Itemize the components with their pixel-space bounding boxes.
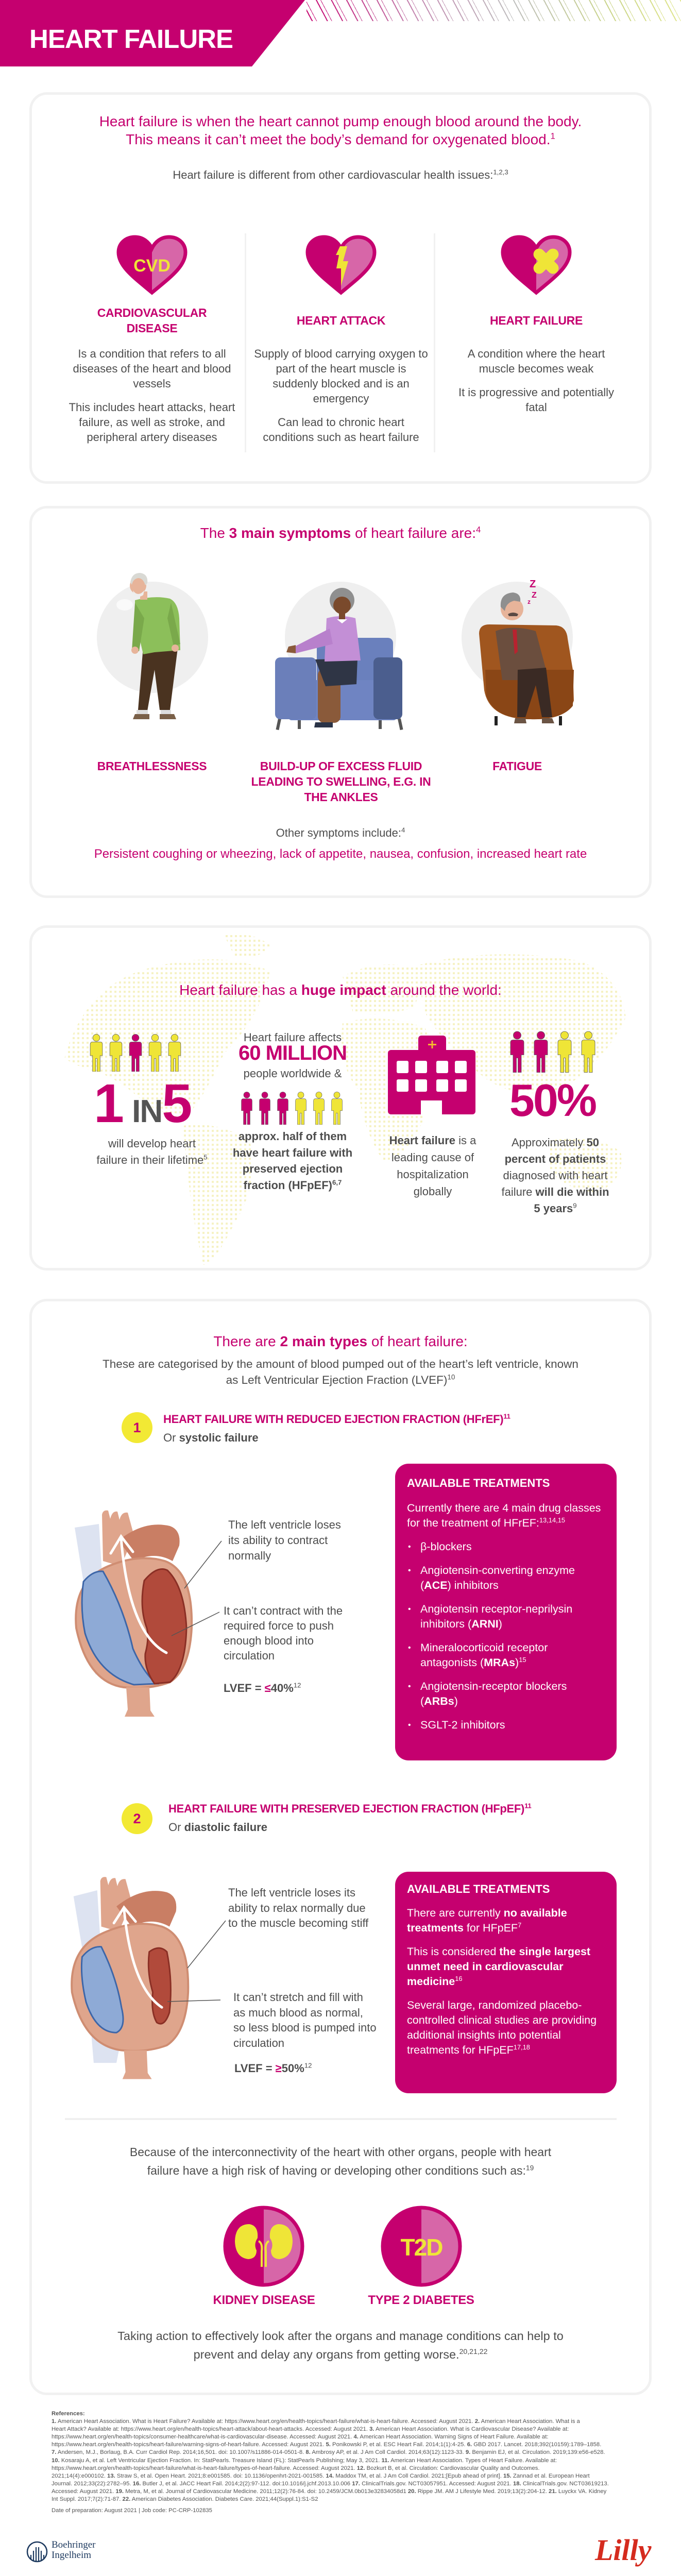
treatments box 1: Angiotensin-converting enzyme (ACE) inhibitors (420, 1564, 575, 1591)
symptom illustrations (97, 573, 574, 731)
big number: 50% (509, 1075, 595, 1126)
caption: will develop heart (108, 1137, 196, 1150)
title: impact: Heart failure has a huge impact around the world: (179, 982, 502, 998)
text: Supply of blood carrying oxygen to part of the heart muscle is suddenly blocked and is an emergency (254, 347, 428, 405)
treatments box 1: AVAILABLE TREATMENTS (407, 1477, 550, 1489)
divider (434, 233, 435, 452)
column: heart attack (254, 235, 428, 444)
treatments box 1: β-blockers (420, 1540, 472, 1553)
column: CVD (69, 235, 235, 444)
label: fatigue: FATIGUE (492, 759, 542, 773)
panel: symptoms (29, 506, 652, 898)
LVEF 1: LVEF = ≤40%12 (224, 1682, 301, 1694)
caption (96, 1137, 208, 1166)
logo: Lilly: Lilly (595, 2533, 652, 2567)
stat: 1 in 5 (90, 1034, 208, 1166)
logo: Boehringer Ingelheim (27, 2539, 96, 2563)
type 1 heading: Or systolic failure (163, 1431, 259, 1444)
heading (97, 306, 207, 335)
logo: Boehringer Ingelheim: Ingelheim (52, 2550, 91, 2561)
comorbidities intro (130, 2145, 551, 2177)
references: https://www.heart.org/en/health-topics/consumer-healthcare/what-is-cardiovascular-disease. Accessed: August 2021. 4. American Heart Association. Warning Signs of Heart Failure. Available at: (52, 2434, 548, 2440)
headline: Heart failure is when the heart cannot pump enough blood around the body. (99, 113, 582, 129)
comorbidities intro: Because of the interconnectivity of the heart with other organs, people with heart (130, 2145, 551, 2159)
heading: HEART ATTACK (297, 314, 385, 327)
stat: 60 million (233, 1031, 352, 1191)
text: This includes heart attacks, heart failure, as well as stroke, and peripheral artery diseases (69, 401, 235, 444)
treatments box 1: Angiotensin receptor-neprilysin inhibitors (ARNI) (420, 1603, 572, 1630)
references: Accessed: August 2021. 19. Metra, M, et al. Journal of Cardiovascular Medicine. 2011;12(2):76-84. doi: 10.2459/JCM.0b013e32834058d1 20. Rippe JM. AM J Lifestyle Med. 2019;13(2):204-12. 21. Luyckx VA. Kidney (52, 2488, 606, 2495)
LVEF 2: LVEF = ≥50%12 (234, 2062, 312, 2075)
references: 10. Kosaraju A, et al. Left Ventricular Ejection Fraction. In: StatPearls. Treasure Island (FL): StatPearls Publishing; May 3, 2021. 11. American Heart Association. Types of Heart Failure. Available at: (52, 2458, 557, 2464)
type 1 heading: HEART FAILURE WITH REDUCED EJECTION FRACTION (HFrEF)11 (163, 1413, 510, 1426)
treatments box 1: Angiotensin-receptor blockers (ARBs) (420, 1680, 567, 1707)
icon: people 50 (510, 1031, 595, 1073)
title: HEART FAILURE (29, 24, 233, 54)
panel: types (29, 1299, 652, 2395)
caption: Heart failure is a leading cause of hospitalization globally (389, 1134, 476, 1198)
icon: kidney disease (213, 2206, 315, 2307)
treatments box 1: SGLT-2 inhibitors (420, 1719, 505, 1731)
icon: type 2 diabetes: T2D (401, 2234, 442, 2261)
symptoms title: The 3 main symptoms of heart failure are:4 (200, 525, 481, 541)
comorbidities intro: failure have a high risk of having or developing other conditions such as:19 (147, 2164, 534, 2177)
label: TYPE 2 DIABETES (368, 2293, 474, 2307)
column: heart failure (458, 235, 614, 414)
text: HFrEF description: The left ventricle loses its ability to contract normally (228, 1518, 341, 1562)
figure: sleeping man: Z (530, 579, 536, 590)
leader lines 2 (167, 1921, 226, 2002)
icon: type 2 diabetes (368, 2206, 474, 2307)
other symptoms: Other symptoms include:4 (276, 826, 405, 839)
badge 2: 2 (133, 1811, 141, 1826)
references: https://www.heart.org/en/health-topics/heart-failure/what-is-heart-failure/types-of-heart-failure. Accessed: August 2021. 12. Bozkurt B, et al. Circulation: Cardiovascular Quality and Outcomes. (52, 2465, 540, 2471)
panel: definition (29, 92, 652, 484)
panel: impact (29, 925, 652, 1270)
icon: CVD heart (116, 235, 188, 295)
date of preparation: Date of preparation: August 2021 | Job code: PC-CRP-102835 (52, 2507, 212, 2514)
subtitle (103, 1358, 578, 1386)
icon: hospital (388, 1036, 475, 1114)
dotted world map (65, 935, 625, 1265)
text: A condition where the heart muscle becomes weak (468, 347, 605, 375)
label: fluid build-up: BUILD-UP OF EXCESS FLUID LEADING TO SWELLING, E.G. IN THE ANKLES (251, 759, 431, 804)
stat: 50 percent (501, 1031, 609, 1215)
treatments box 1: Currently there are 4 main drug classes for the treatment of HFrEF:13,14,15 (407, 1502, 601, 1529)
references: 1. American Heart Association. What is Heart Failure? Available at: https://www.heart.org/en/health-topics/heart-failure/what-is-heart-failure. Accessed: August 2021. 2. American Heart Association. What is a (52, 2418, 580, 2425)
text (69, 347, 235, 444)
heading: CARDIOVASCULAR (97, 306, 207, 319)
leader lines 1 (171, 1540, 222, 1636)
references: https://www.heart.org/en/health-topics/heart-failure/warning-signs-of-heart-failure. Accessed: August 2021. 5. Ponikowski P, et al. ESC Heart Fail. 2014;1(1):4-25. 6. GBD 2017. Lancet. 2018;392(10159):1789–1858. (52, 2442, 601, 2448)
headline (99, 113, 582, 147)
references: Journal. 2012;33(22):2782–95. 16. Butler J, et al. JACC Heart Fail. 2014;2(2):97-112. doi:10.1016/j.jchf.2013.10.006 17. ClinicalTrials.gov. NCT03057951. Accessed: August 2021. 18. ClinicalTrials.gov. NCT03619213. (52, 2481, 609, 2487)
big number: 60 MILLION (239, 1042, 347, 1064)
text: Is a condition that refers to all diseases of the heart and blood vessels (73, 347, 231, 390)
subtitle: These are categorised by the amount of blood pumped out of the heart’s left ventricle, known (103, 1358, 578, 1370)
references: Int Suppl. 2017;7(2):71-87. 22. American Diabetes Association. Diabetes Care. 2021;44(Suppl.1):S1-S2 (52, 2496, 318, 2502)
divider (245, 233, 246, 452)
stat: 60 million: people worldwide & (244, 1067, 342, 1080)
subtitle: as Left Ventricular Ejection Fraction (LVEF)10 (226, 1374, 455, 1386)
treatments box 2: AVAILABLE TREATMENTS (407, 1883, 550, 1895)
decorative stripes (307, 0, 681, 21)
type 2 heading (122, 1802, 532, 1834)
icon: people 1 in 5 (90, 1034, 181, 1072)
heading: DISEASE (127, 321, 177, 335)
closing statement: prevent and delay any organs from getting worse.20,21,22 (194, 2347, 487, 2361)
treatments box 1 (395, 1464, 617, 1760)
figure: woman in armchair (275, 582, 403, 730)
text: HFpEF description: The left ventricle loses its ability to relax normally due to the muscle becoming stiff (228, 1886, 368, 1929)
references: 7. Andersen, M.J., Borlaug, B.A. Curr Cardiol Rep. 2014;16,501. doi: 10.1007/s11886-014-0501-8. 8. Ambrosy AP, et al. J Am Coll Cardiol. 2014;63(12):1123-33. 9. Benjamin EJ, et al. Circulation. 2019;139:e56-e528. (52, 2449, 605, 2455)
heart illustration 2 (71, 1877, 190, 2079)
type 2 heading: Or diastolic failure (168, 1821, 267, 1834)
treatments box 2: Several large, randomized placebo-controlled clinical studies are providing additional insights into potential treatments for HFpEF17,18 (407, 1999, 597, 2056)
closing statement (117, 2329, 564, 2361)
headline: This means it can’t meet the body’s demand for oxygenated blood.1 (126, 131, 555, 147)
treatments box 1: Mineralocorticoid receptor antagonists (MRAs)15 (420, 1641, 548, 1669)
icon: CVD heart: CVD (133, 256, 171, 276)
treatments box 2 (395, 1872, 617, 2093)
references: References: (52, 2411, 85, 2417)
heart illustration 1 (75, 1511, 193, 1717)
text (254, 347, 428, 444)
figure: sleeping man: Z (532, 591, 537, 600)
caption: failure in their lifetime5 (96, 1154, 208, 1166)
text: It is progressive and potentially fatal (458, 386, 614, 414)
badge 1: 1 (133, 1420, 141, 1435)
heading: HEART FAILURE (490, 314, 583, 327)
closing statement: Taking action to effectively look after the organs and manage conditions can help to (117, 2329, 564, 2343)
text: HFpEF fill: It can’t stretch and fill with as much blood as normal, so less blood is pumped into circulation (233, 1991, 377, 2049)
references: 2021;14(4):e000102. 13. Straw S, et al. Open Heart. 2021;8:e001585. doi: 10.1136/openhrt-2021-001585. 14. Maddox TM, et al. J Am Coll Cardiol. 2021;[Epub ahead of print]. 15. Zannad et al. European Heart (52, 2473, 590, 2479)
big number: 1 IN5 (94, 1073, 192, 1134)
references: Heart Attack? Available at: https://www.heart.org/en/health-topics/heart-attack/about-heart-attacks. Accessed: August 2021. 3. American Heart Association. What is Cardiovascular Disease? Available at: (52, 2426, 569, 2432)
stat: 60 million: Heart failure affects (244, 1031, 342, 1044)
figure: breathless man (97, 573, 208, 719)
caption: approx. half of them have heart failure with preserved ejection fraction (HFpEF)6,7 (233, 1130, 352, 1191)
other symptoms list: Persistent coughing or wheezing, lack of appetite, nausea, confusion, increased heart rate (94, 847, 587, 861)
icon: plaster heart (501, 235, 572, 295)
type 2 heading: HEART FAILURE WITH PRESERVED EJECTION FRACTION (HFpEF)11 (168, 1802, 531, 1815)
figure: sleeping man: z (527, 598, 531, 605)
stat: hospitalization (388, 1036, 476, 1198)
icon: lightning heart (306, 235, 376, 295)
header banner (0, 0, 305, 66)
label: KIDNEY DISEASE (213, 2293, 315, 2307)
badge 1 (122, 1412, 152, 1443)
treatments box 2: There are currently no available treatments for HFpEF7 (407, 1907, 567, 1934)
label: breathlessness: BREATHLESSNESS (97, 759, 207, 773)
badge 2 (122, 1803, 152, 1834)
treatments box 2: This is considered the single largest unmet need in cardiovascular medicine16 (407, 1945, 590, 1988)
logo: Boehringer Ingelheim: Boehringer (52, 2539, 95, 2550)
references (52, 2411, 609, 2502)
text: HFrEF force: It can’t contract with the required force to push enough blood into circulation (224, 1604, 343, 1662)
figure: sleeping man (462, 579, 574, 725)
text (458, 347, 614, 414)
caption: Approximately 50 percent of patients diagnosed with heart failure will die within 5 years9 (501, 1136, 609, 1215)
subline: Heart failure is different from other cardiovascular health issues:1,2,3 (173, 168, 508, 181)
type 1 heading (122, 1412, 510, 1444)
icon: people half (241, 1092, 343, 1125)
text: Can lead to chronic heart conditions such as heart failure (263, 416, 419, 444)
title: types: There are 2 main types of heart failure: (213, 1333, 468, 1349)
